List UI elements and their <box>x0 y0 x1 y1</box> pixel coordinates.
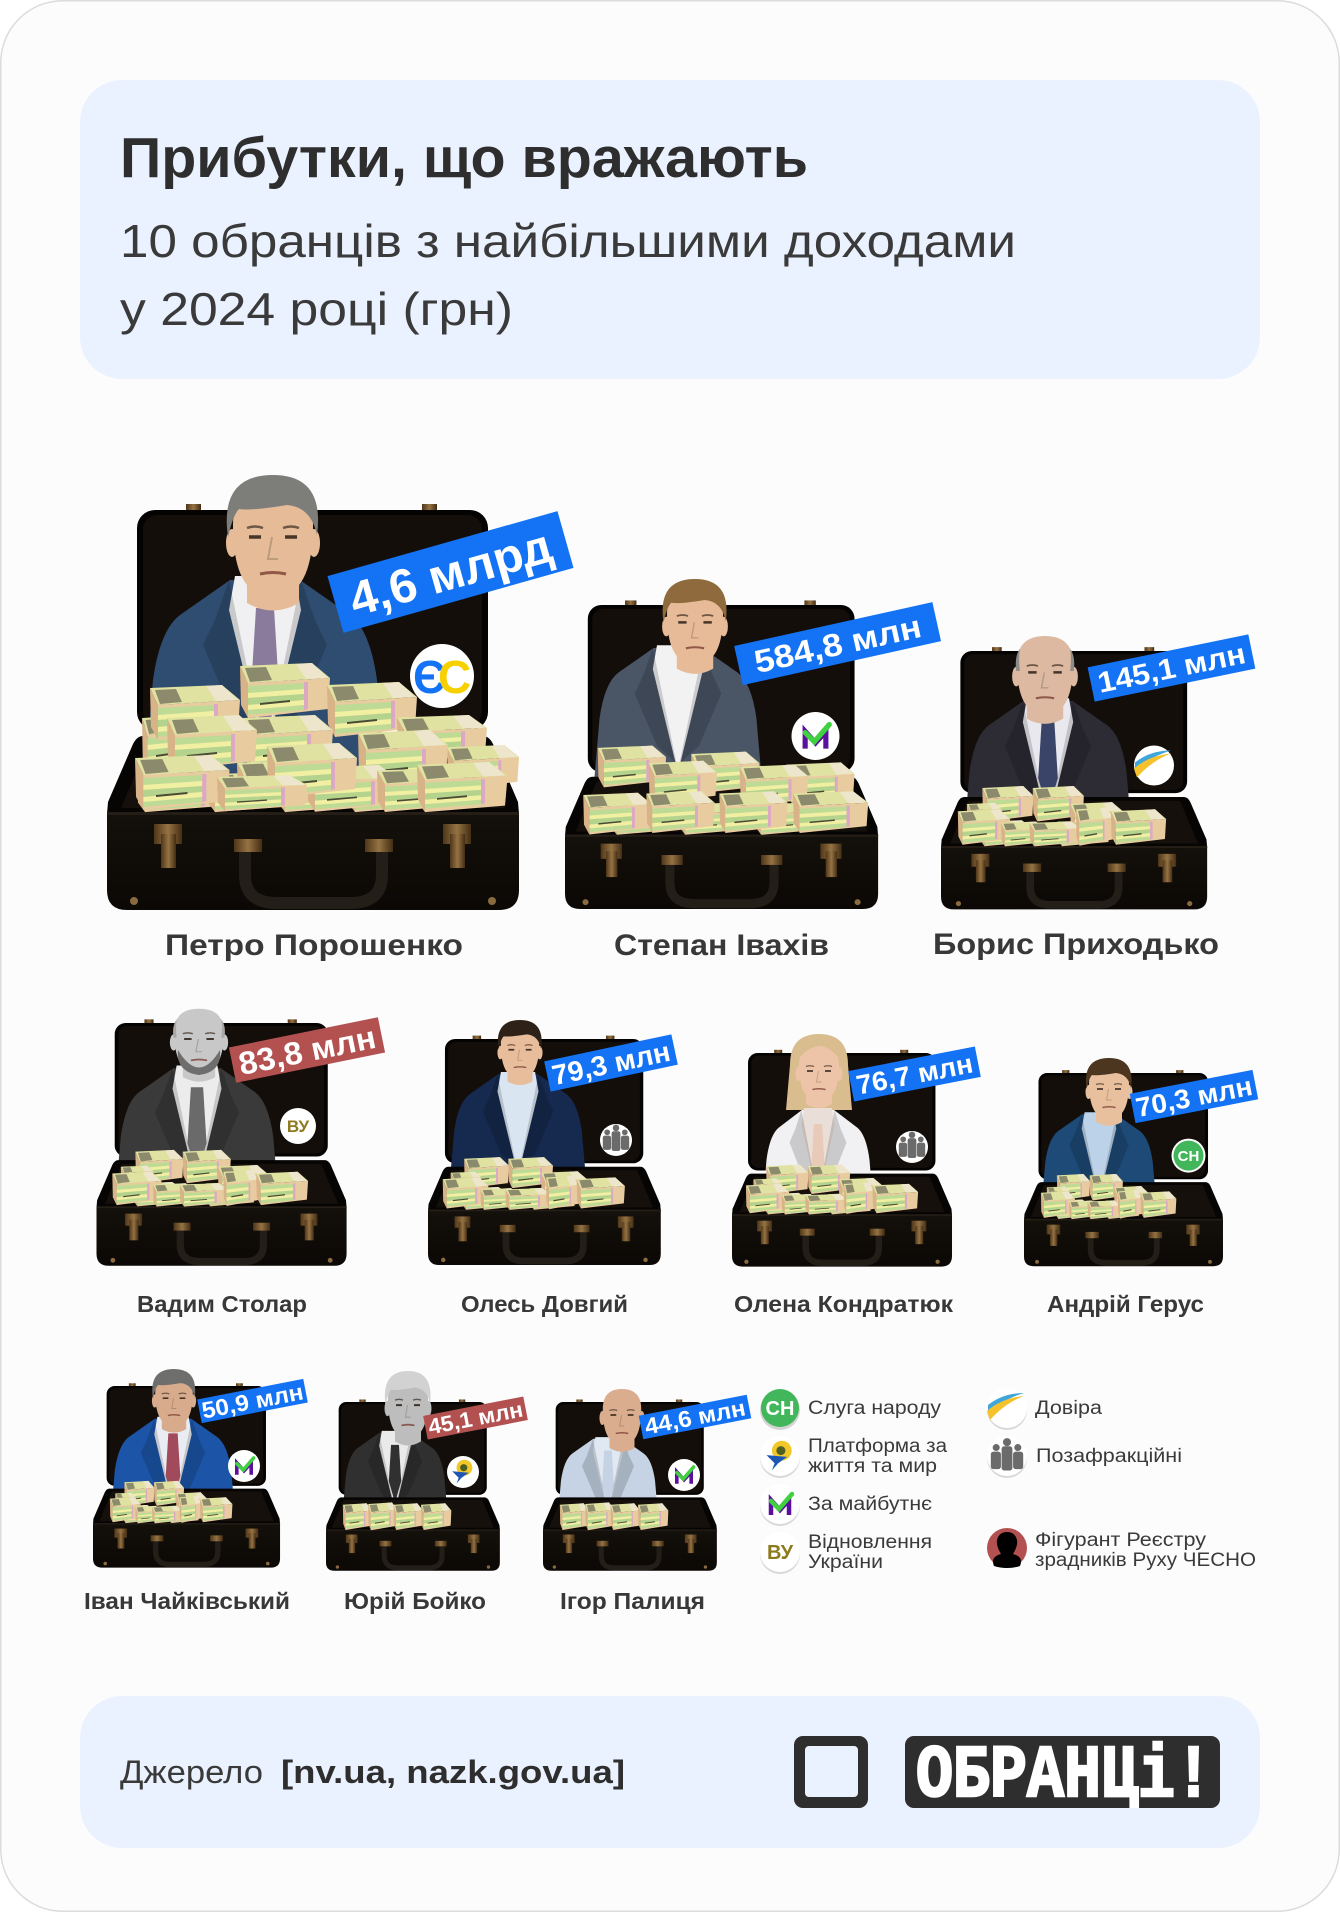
panel: Ігор Палиця <box>543 1389 751 1614</box>
legend item: Відновлення України <box>760 1532 932 1574</box>
party badge: Позафракційні <box>600 1124 632 1156</box>
suitcase lid <box>137 504 488 730</box>
legend item: Платформа за життя та мир <box>760 1436 947 1478</box>
legend item: Відновлення України: Відновлення <box>808 1532 932 1553</box>
suitcase body <box>107 736 519 910</box>
portrait <box>148 475 382 774</box>
suitcase lid <box>588 600 855 772</box>
party badge: ЄС: С <box>438 651 471 703</box>
panel: Іван Чайківський <box>84 1369 308 1614</box>
amount tag: traitor registry: 83,8 млн <box>235 1019 379 1082</box>
legend <box>760 1388 1256 1574</box>
suitcase body <box>565 777 878 909</box>
subtitle: 10 обранців з найбільшими доходами <box>120 215 1016 267</box>
panel: Степан Івахів <box>565 579 941 962</box>
suitcase lid <box>960 647 1187 793</box>
legend item: Слуга народу <box>760 1389 942 1430</box>
amount tag: 76,7 млн <box>854 1049 975 1100</box>
money stack <box>343 1502 451 1530</box>
legend item: Слуга народу: СН <box>766 1398 794 1420</box>
amount tag: 584,8 млн <box>751 608 925 680</box>
suitcase body <box>941 797 1207 909</box>
suitcase lid <box>115 1019 328 1157</box>
party badge: Платформа за життя та мир <box>447 1456 479 1488</box>
suitcase lid <box>556 1399 704 1495</box>
suitcase body <box>326 1497 500 1571</box>
party badge: ВУ <box>280 1108 316 1144</box>
money stack <box>443 1157 625 1210</box>
portrait <box>590 579 766 823</box>
name: Олесь Довгий <box>461 1291 628 1317</box>
legend item: Позафракційні: Позафракційні <box>1036 1446 1182 1467</box>
amount tag <box>734 602 941 685</box>
money stack <box>112 1150 308 1207</box>
source text: Джерело <box>120 1754 263 1790</box>
panel: Андрій Герус <box>1024 1058 1258 1317</box>
panel: Юрій Бойко <box>326 1371 528 1614</box>
portrait <box>112 1009 282 1238</box>
party badge: Довіра <box>1134 746 1174 786</box>
money stack <box>746 1165 918 1215</box>
legend item: Слуга народу: Слуга народу <box>808 1398 942 1419</box>
amount tag: 79,3 млн <box>549 1036 673 1091</box>
legend item: Платформа за життя та мир: Платформа за <box>808 1436 947 1457</box>
legend item: Фігурант Реєстру зрадників: зрадників Руху ЧЕСНО <box>1035 1550 1256 1571</box>
amount tag: 4,6 млрд <box>344 520 558 627</box>
amount tag: 70,3 млн <box>1133 1071 1255 1123</box>
name: Ігор Палиця <box>560 1588 705 1614</box>
money stack <box>1041 1174 1176 1219</box>
name: Петро Порошенко <box>165 929 463 962</box>
legend item: За майбутнє <box>760 1484 932 1526</box>
legend item: Відновлення України: ВУ <box>767 1542 794 1564</box>
name: Вадим Столар <box>137 1291 307 1317</box>
money stack <box>560 1502 668 1530</box>
suitcase body <box>732 1174 952 1267</box>
name: Іван Чайківський <box>84 1588 290 1614</box>
name: Степан Івахів <box>614 929 829 962</box>
panel: Олена Кондратюк <box>732 1034 981 1317</box>
source text: [nv.ua, nazk.gov.ua] <box>281 1754 625 1790</box>
party badge: Слуга народу <box>1172 1139 1206 1173</box>
portrait <box>1039 1058 1159 1234</box>
logo: wordmark: ОБРАНЦі! <box>916 1735 1212 1819</box>
party badge: ЄС: Є <box>413 651 446 703</box>
name: Борис Приходько <box>933 928 1219 961</box>
suitcase lid <box>1038 1070 1208 1179</box>
money stack <box>583 746 868 835</box>
suitcase lid <box>107 1383 266 1486</box>
party badge: Слуга народу: СН <box>1178 1148 1199 1165</box>
portrait <box>108 1369 238 1549</box>
suitcase body <box>1024 1182 1223 1266</box>
party badge: За майбутнє <box>228 1450 260 1482</box>
money stack <box>110 1481 232 1523</box>
amount tag: 50,9 млн <box>199 1378 306 1424</box>
party badge: За майбутнє <box>668 1459 700 1491</box>
portrait <box>960 636 1136 876</box>
legend item: Відновлення України: України <box>808 1552 883 1573</box>
legend item: Фігурант Реєстру зрадників <box>987 1528 1256 1571</box>
legend item: Позафракційні <box>987 1436 1182 1478</box>
legend item: Фігурант Реєстру зрадників: Фігурант Реєстру <box>1035 1530 1207 1551</box>
suitcase body <box>543 1497 717 1571</box>
panel: Олесь Довгий <box>428 1020 678 1317</box>
panel: Вадим Столар <box>96 1009 385 1317</box>
suitcase lid <box>339 1399 487 1495</box>
legend item: Платформа за життя та мир: життя та мир <box>808 1456 937 1477</box>
party badge: ЄС <box>410 644 474 708</box>
panel: Борис Приходько <box>933 634 1255 961</box>
suitcase body <box>428 1167 661 1265</box>
suitcase lid <box>748 1050 935 1170</box>
portrait <box>556 1389 660 1544</box>
logo: square <box>794 1736 868 1808</box>
amount tag: 44,6 млн <box>642 1395 748 1439</box>
suitcase lid <box>445 1036 643 1163</box>
subtitle: у 2024 році (грн) <box>120 283 513 335</box>
amount tag: 145,1 млн <box>1095 638 1248 700</box>
name: Юрій Бойко <box>344 1588 486 1614</box>
portrait <box>760 1034 876 1235</box>
money stack <box>135 663 519 812</box>
legend item: За майбутнє: За майбутнє <box>808 1494 932 1515</box>
panel: Петро Порошенко <box>107 475 574 962</box>
name: Олена Кондратюк <box>734 1291 954 1317</box>
legend item: Довіра: Довіра <box>1035 1398 1102 1419</box>
portrait <box>340 1371 450 1543</box>
party badge: Позафракційні <box>896 1131 928 1163</box>
panel: footer <box>80 1696 1260 1848</box>
name: Андрій Герус <box>1047 1291 1204 1317</box>
amount tag: traitor registry: 45,1 млн <box>426 1397 525 1439</box>
party badge: За майбутнє <box>792 712 840 760</box>
party badge: ВУ: ВУ <box>287 1117 310 1136</box>
suitcase body <box>96 1160 347 1266</box>
panel: header <box>80 80 1260 379</box>
legend item: Довіра <box>987 1388 1102 1430</box>
title: Прибутки, що вражають <box>120 126 808 190</box>
portrait <box>447 1020 589 1217</box>
money stack <box>958 786 1166 846</box>
suitcase body <box>93 1489 280 1568</box>
